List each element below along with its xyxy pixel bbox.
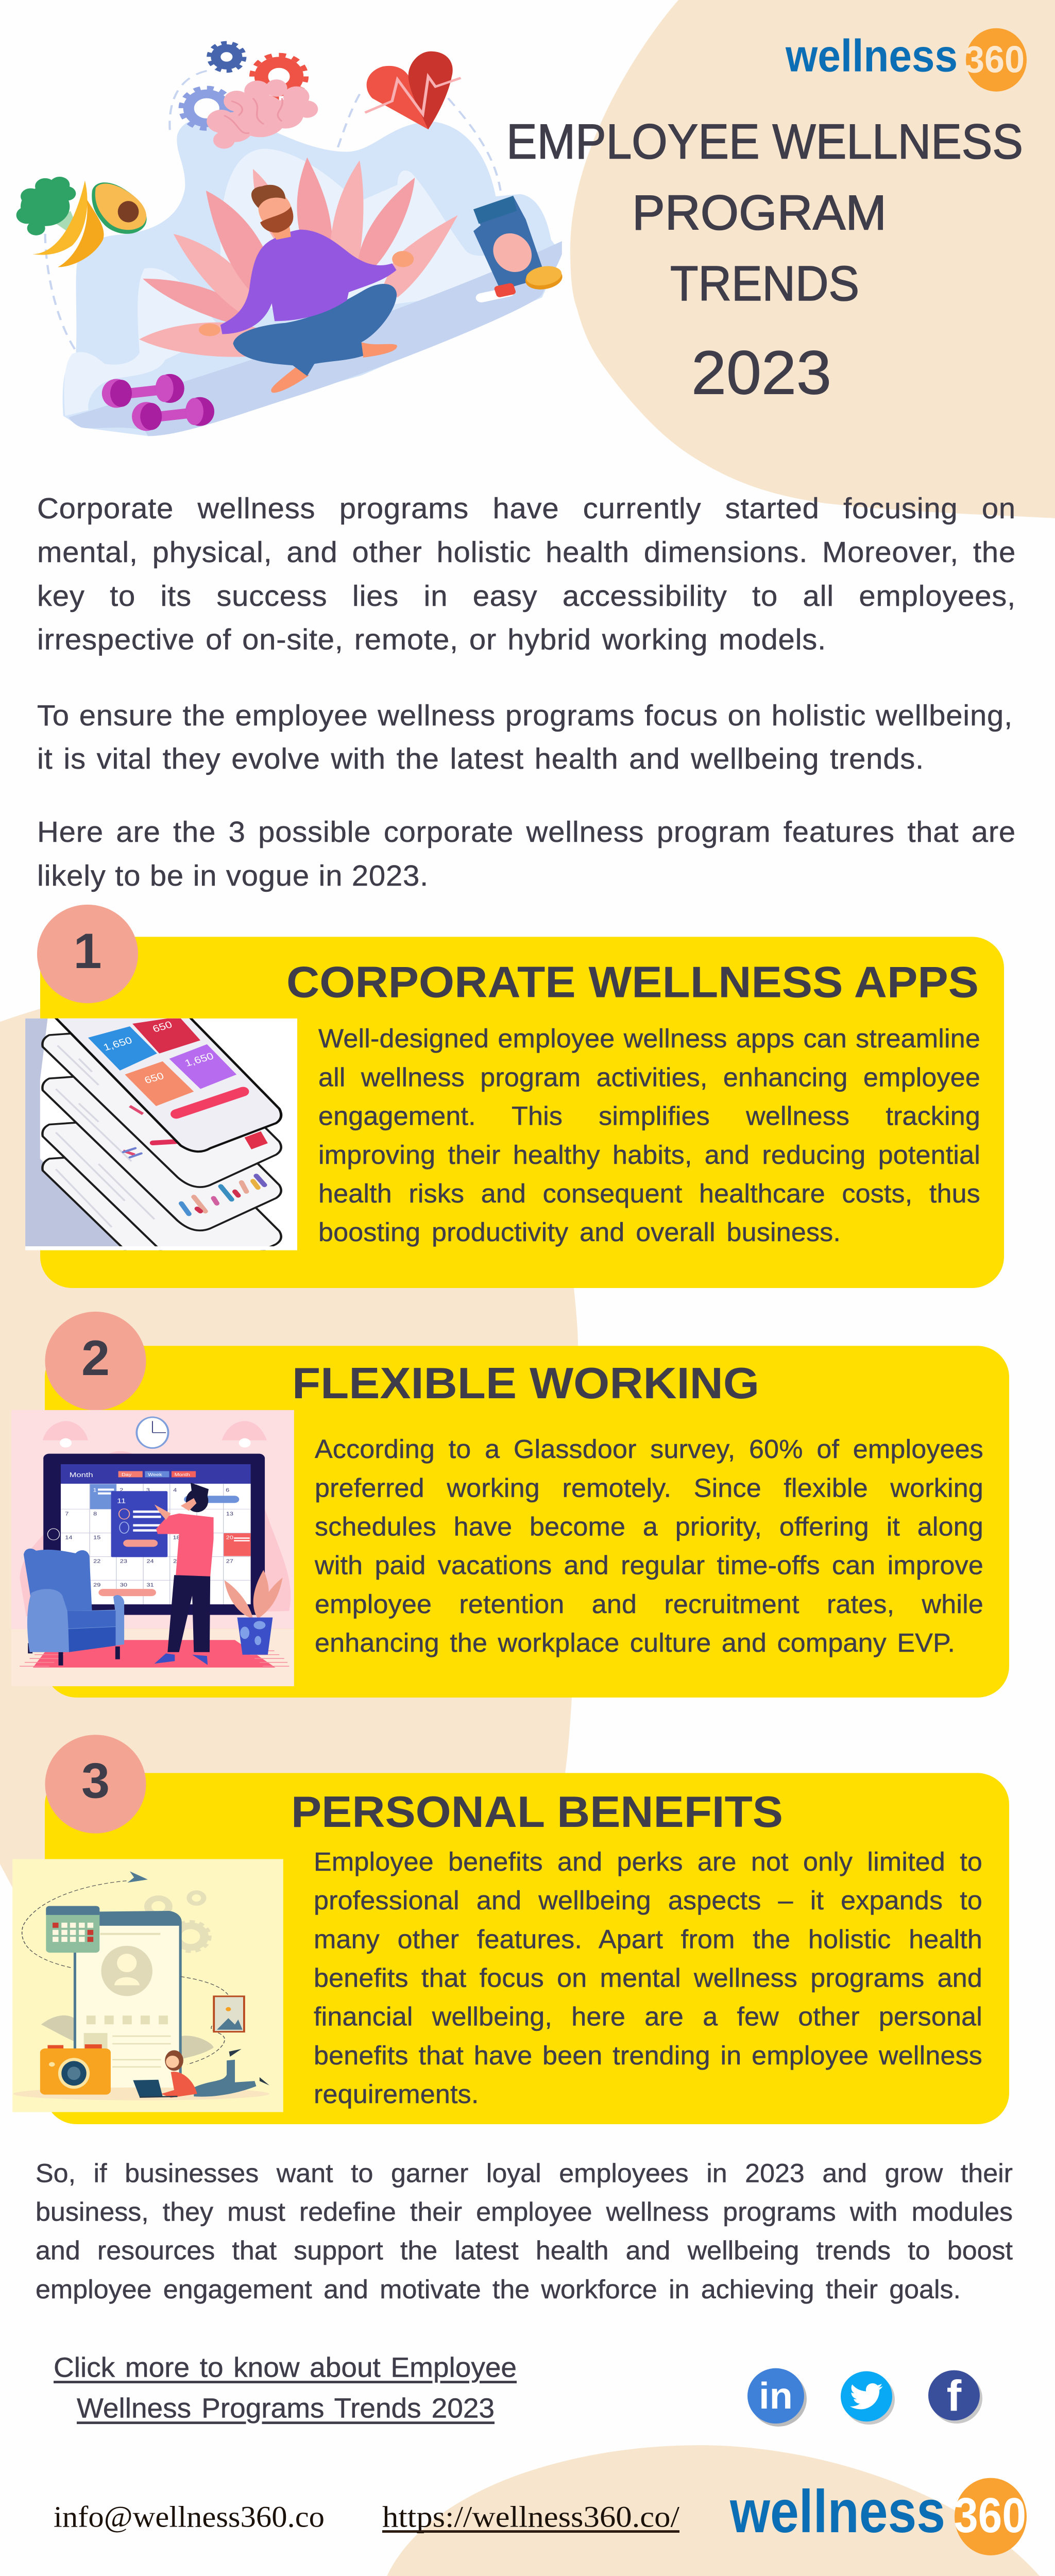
bars	[181, 1176, 264, 1214]
lamps	[43, 1421, 267, 1440]
logo: wellness360 top: 360	[964, 38, 1025, 80]
card 3 body text: benefits that have been trending in employee wellness	[314, 2041, 982, 2071]
card 2 body text: preferred working remotely. Since flexible working	[315, 1473, 983, 1503]
icon: food	[16, 177, 147, 267]
top phone	[49, 1011, 281, 1151]
image: calendar planning: 25	[173, 1558, 180, 1564]
pale blue backdrop	[63, 120, 562, 436]
man	[167, 1575, 210, 1652]
tablet	[43, 1454, 265, 1615]
number badge 1: 1	[73, 923, 102, 979]
number badge 2: 2	[81, 1330, 110, 1386]
heading: personal benefits: PERSONAL BENEFITS	[291, 1788, 783, 1837]
neck and head	[267, 223, 291, 240]
legs	[233, 284, 397, 376]
image: calendar planning: 31	[146, 1583, 154, 1588]
light arches	[220, 149, 506, 318]
image: calendar planning: 24	[146, 1558, 154, 1564]
image: stacked phones	[25, 1018, 297, 1250]
panel: card 3	[12, 1735, 1009, 2124]
panel: card 2	[11, 1312, 1009, 1698]
laptop	[133, 2080, 163, 2097]
background blob: middle left	[0, 969, 578, 2012]
social icon: facebook	[928, 2370, 982, 2424]
calendar	[46, 1906, 99, 1953]
camera	[47, 2045, 63, 2050]
intro paragraph 3: Here are the 3 possible corporate wellness program features that are	[37, 816, 1016, 848]
popup	[111, 1491, 167, 1557]
image: calendar planning: 13	[226, 1512, 233, 1517]
icon: heart	[365, 52, 461, 129]
dashed path and plane	[22, 1881, 228, 2064]
intro paragraph 1: irrespective of on-site, remote, or hybrid working models.	[37, 623, 826, 656]
sweater	[220, 230, 397, 334]
card 2 body text: enhancing the workplace culture and company EVP.	[315, 1629, 955, 1658]
hero illustration: meditating man	[16, 43, 566, 436]
image: calendar planning: 6	[226, 1487, 229, 1493]
title: PROGRAM	[632, 184, 887, 240]
intro paragraph 1: mental, physical, and other holistic health dimensions. Moreover, the	[37, 536, 1016, 569]
social icon: linkedin: in	[759, 2376, 793, 2417]
number badge 2	[45, 1312, 146, 1410]
card 2 body text: with paid vacations and regular time-offs can improve	[315, 1551, 983, 1580]
lower phones	[41, 1032, 282, 1250]
image: stacked phones: 1,650	[183, 1051, 215, 1069]
floor shadow	[13, 2088, 269, 2100]
feet	[362, 342, 397, 358]
image: calendar planning: 15	[93, 1535, 100, 1540]
image: stacked phones: 650	[143, 1071, 166, 1086]
card 3 body text: professional and wellbeing aspects – it expands to	[314, 1886, 982, 1916]
intro paragraph 3	[37, 816, 1016, 892]
image: calendar planning: 30	[120, 1583, 127, 1588]
call to action link: Click more to know about Employee	[54, 2351, 517, 2383]
logo: wellness360 top	[785, 28, 1027, 92]
picture frame	[214, 1996, 244, 2032]
image: calendar planning: 1	[93, 1487, 97, 1493]
intro paragraph 2: To ensure the employee wellness programs focus on holistic wellbeing,	[37, 699, 1013, 732]
card 1 body text: improving their healthy habits, and reducing potential	[318, 1141, 980, 1170]
image: calendar planning: 2	[120, 1487, 123, 1493]
heading: flexible working: FLEXIBLE WORKING	[292, 1359, 759, 1408]
card 2 body text	[314, 1435, 983, 1658]
background blob: bottom	[387, 2445, 1040, 2576]
logo: wellness360 top: wellness	[785, 30, 958, 81]
background blob: top right	[570, 0, 1055, 518]
intro paragraph 1	[37, 492, 1016, 656]
call to action link: Wellness Programs Trends 2023	[77, 2393, 495, 2424]
intro paragraph 2: it is vital they evolve with the latest health and wellbeing trends.	[37, 742, 924, 775]
closing paragraph: and resources that support the latest health and wellbeing trends to boost	[36, 2236, 1013, 2265]
floor	[69, 241, 562, 436]
lotus petals	[139, 157, 458, 357]
image: calendar planning: 27	[226, 1558, 233, 1564]
card 2 body text: schedules have become a priority, offering it along	[315, 1513, 983, 1541]
image: calendar planning: 14	[65, 1535, 73, 1540]
icon: pill bottle	[473, 196, 566, 303]
icon: brain	[207, 79, 318, 149]
image: stacked phones: 1,650	[101, 1035, 134, 1053]
card 1 body text: boosting productivity and overall business.	[318, 1218, 841, 1247]
number badge 3: 3	[81, 1752, 110, 1808]
hands	[199, 324, 220, 336]
card 1 body text: all wellness program activities, enhancing employee	[318, 1063, 980, 1092]
closing paragraph: So, if businesses want to garner loyal employees in 2023 and grow their	[36, 2159, 1013, 2188]
logo: wellness360 bottom: 360	[954, 2487, 1026, 2543]
intro paragraph 2	[37, 699, 1013, 775]
image: calendar planning: 7	[65, 1512, 69, 1517]
leaves	[41, 2015, 214, 2059]
icon: gears	[181, 43, 306, 129]
contact: email: info@wellness360.co	[54, 2500, 325, 2533]
intro paragraph 3: likely to be in vogue in 2023.	[37, 859, 429, 892]
title: TRENDS	[670, 256, 859, 311]
heading: corporate wellness apps: CORPORATE WELLNESS APPS	[286, 958, 979, 1007]
call to action link	[54, 2351, 517, 2425]
card 3 body text: financial wellbeing, here are a few other personal	[314, 2003, 982, 2031]
intro paragraph 1: Corporate wellness programs have currently started focusing on	[37, 492, 1016, 525]
image: calendar planning: Month	[175, 1472, 190, 1478]
social icon: twitter	[841, 2371, 895, 2425]
card 3 body text: requirements.	[314, 2080, 479, 2109]
year: 2023	[691, 338, 831, 407]
image: calendar planning: 3	[146, 1487, 150, 1493]
closing paragraph: business, they must redefine their employee wellness programs with modules	[36, 2198, 1013, 2227]
intro paragraph 1: key to its success lies in easy accessibility to all employees,	[37, 580, 1016, 612]
contact: website: https://wellness360.co/	[382, 2500, 680, 2533]
panel: card 1	[25, 905, 1004, 1311]
social icon: facebook: f	[947, 2372, 962, 2420]
card 2 body text: employee retention and recruitment rates, while	[315, 1590, 983, 1619]
card 1 body text: Well-designed employee wellness apps can streamline	[318, 1024, 980, 1054]
closing paragraph: employee engagement and motivate the workforce in achieving their goals.	[36, 2275, 961, 2304]
plant	[225, 1570, 283, 1619]
phone screen details	[56, 1045, 155, 1227]
rug	[33, 1640, 275, 1668]
image: calendar planning: Week	[148, 1472, 162, 1478]
logo: wellness360 bottom: wellness	[729, 2478, 945, 2546]
title	[506, 114, 1023, 311]
image: calendar planning: Day	[122, 1472, 131, 1478]
card 3 body text: many other features. Apart from the holistic health	[314, 1925, 982, 1954]
number badge 3	[45, 1735, 146, 1834]
card 1 body text	[318, 1024, 980, 1247]
phone	[75, 1912, 180, 2091]
card 1 body text: engagement. This simplifies wellness tracking	[318, 1102, 980, 1131]
icon: dumbbells	[102, 374, 214, 431]
image: calendar planning: 23	[120, 1558, 127, 1564]
image: calendar planning: 8	[93, 1512, 97, 1517]
card 2 body text: According to a Glassdoor survey, 60% of employees	[315, 1435, 983, 1464]
gears	[148, 1892, 210, 1952]
number badge 1	[37, 905, 138, 1003]
woman	[194, 2060, 256, 2097]
chair	[30, 1643, 117, 1666]
image: calendar planning	[11, 1410, 294, 1686]
card 3 body text: Employee benefits and perks are not only limited to	[314, 1848, 982, 1877]
image: calendar planning: 22	[93, 1558, 100, 1564]
card 3 body text	[314, 1848, 982, 2109]
image: calendar planning: 29	[93, 1583, 100, 1588]
image: calendar planning: 18	[173, 1535, 180, 1540]
image: profile phone and camera	[12, 1859, 283, 2112]
image: calendar planning: Month	[70, 1471, 93, 1479]
closing paragraph	[36, 2159, 1013, 2304]
dashed connectors	[45, 70, 501, 351]
image: calendar planning: 4	[173, 1487, 177, 1493]
image: calendar planning: 11	[117, 1498, 126, 1505]
card 1 body text: health risks and consequent healthcare costs, thus	[318, 1179, 980, 1209]
card 3 body text: benefits that focus on mental wellness programs and	[314, 1964, 982, 1993]
social icon: linkedin	[747, 2368, 807, 2427]
clock	[137, 1417, 168, 1448]
image: calendar planning: 20	[226, 1535, 233, 1540]
image: stacked phones: 650	[151, 1019, 174, 1035]
